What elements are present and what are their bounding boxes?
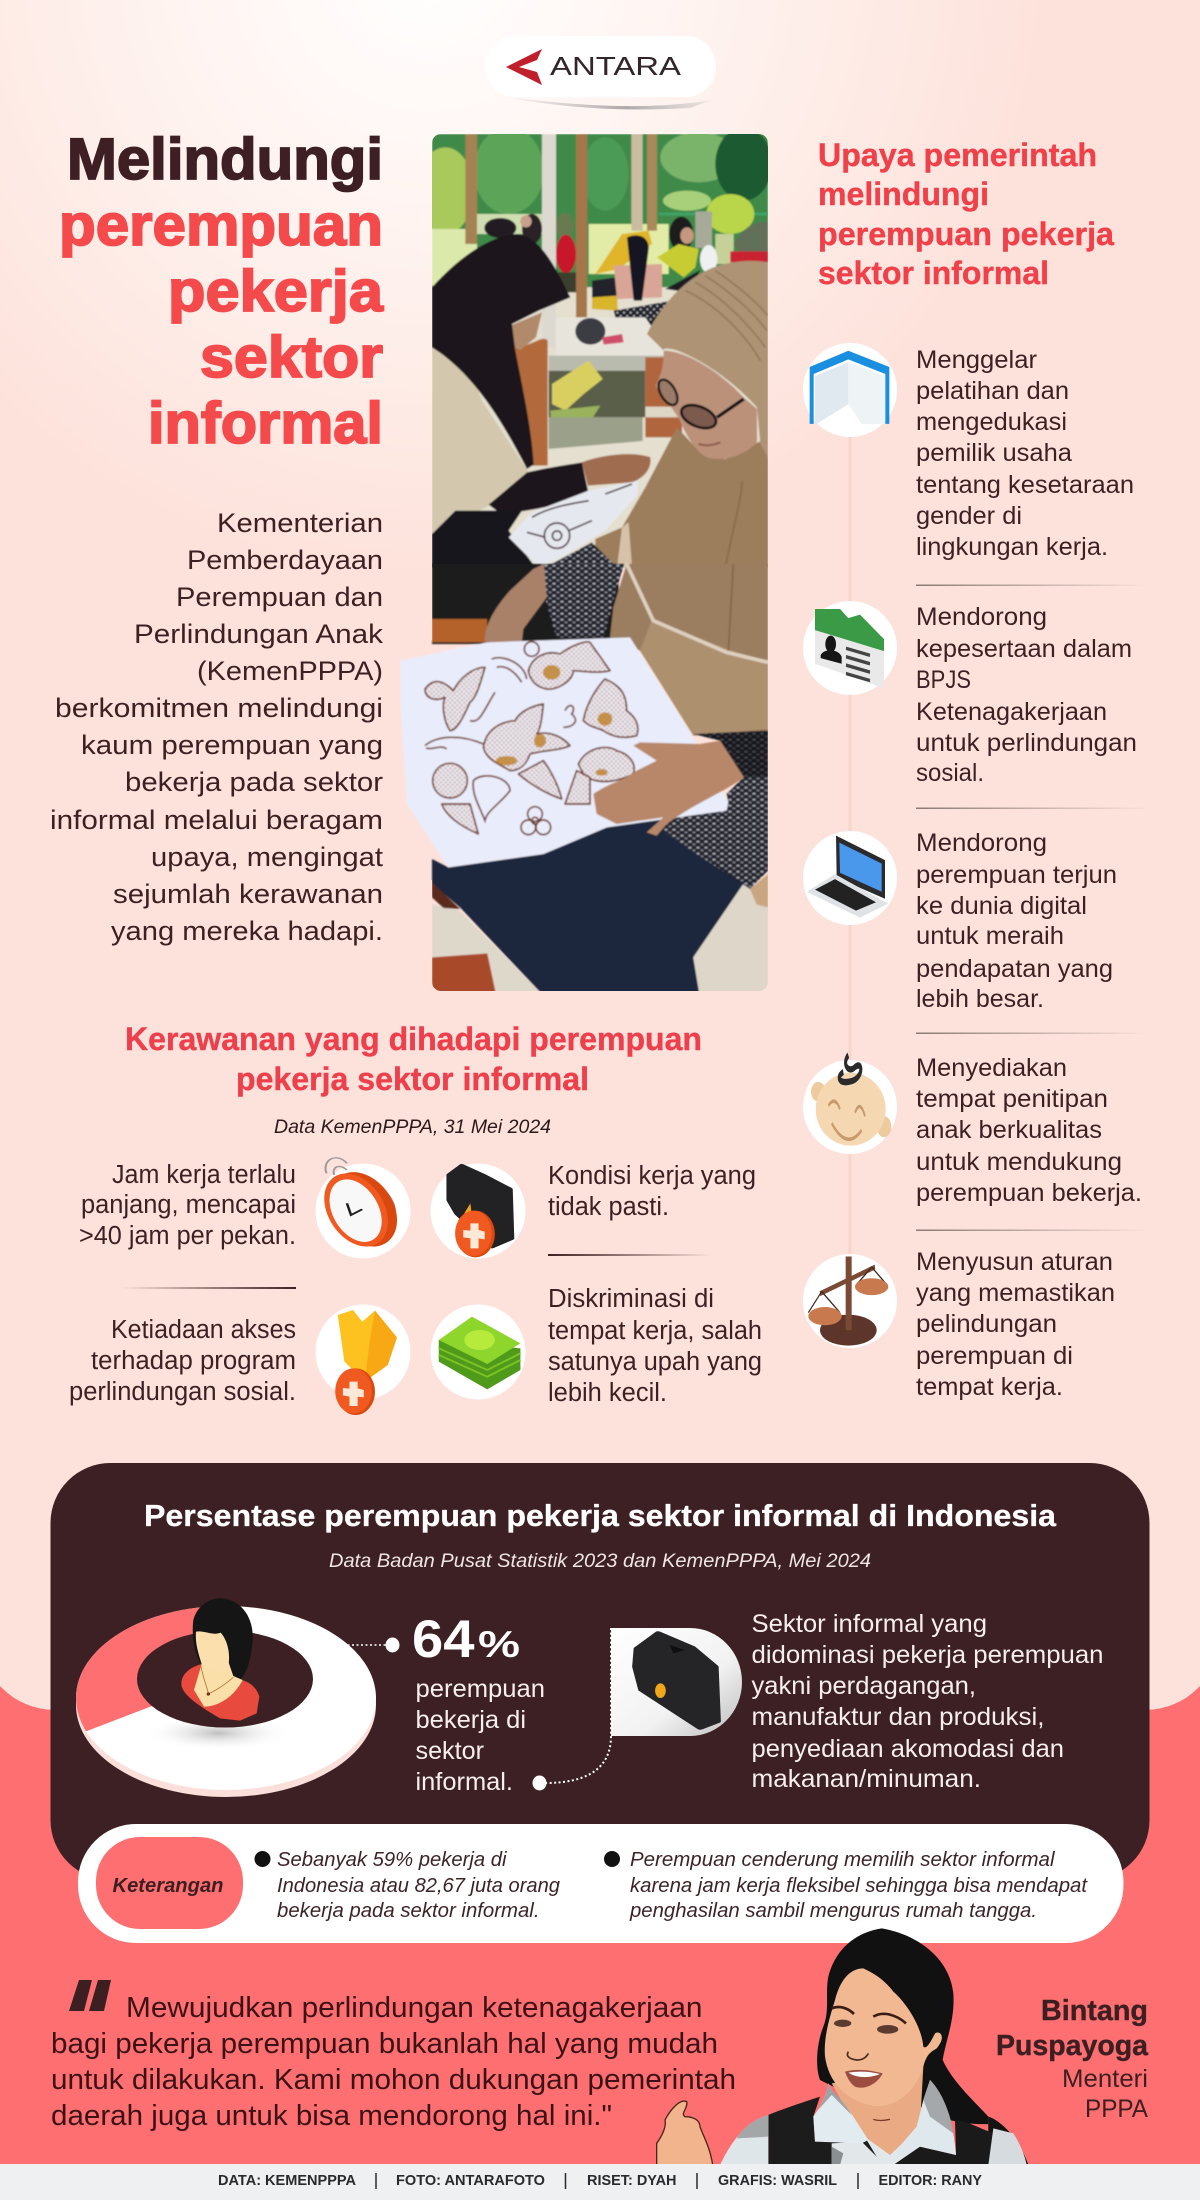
vulnerability: discrimination: Diskriminasi di xyxy=(548,1285,714,1313)
stat caption: bekerja di xyxy=(416,1706,526,1734)
text: digital xyxy=(916,829,1117,1013)
title xyxy=(59,127,384,456)
vulnerability: uncertain conditions: Kondisi kerja yang xyxy=(548,1162,756,1190)
text: dominant sectors: penyediaan akomodasi dan xyxy=(752,1735,1064,1763)
text: BPJS: Mendorong xyxy=(916,603,1047,631)
text: digital: perempuan terjun xyxy=(916,861,1117,889)
intro paragraph: (KemenPPPA) xyxy=(197,656,383,686)
heading: vulnerabilities xyxy=(125,1021,702,1097)
text: childcare: Menyediakan xyxy=(916,1054,1067,1082)
note 1: Sebanyak 59% pekerja di xyxy=(277,1849,507,1871)
vulnerability: discrimination xyxy=(548,1285,762,1407)
timeline line xyxy=(848,400,852,1300)
item 2: BPJS xyxy=(803,601,1137,787)
intro paragraph: Perempuan dan xyxy=(176,582,383,612)
woman figure xyxy=(181,1598,259,1721)
title: sektor xyxy=(200,325,383,390)
footer credits: GRAFIS: WASRIL xyxy=(718,2172,837,2189)
text: digital: untuk meraih xyxy=(916,922,1064,950)
text: regulation: Menyusun aturan xyxy=(916,1248,1113,1276)
footer credits: FOTO: ANTARAFOTO xyxy=(396,2172,545,2189)
icon: alarm clock xyxy=(314,1158,410,1258)
text: digital: pendapatan yang xyxy=(916,955,1113,983)
title: pekerja xyxy=(168,259,384,324)
logo: ANTARA: ANTARA xyxy=(550,51,682,81)
heading: government efforts: sektor informal xyxy=(818,255,1049,291)
text: childcare: perempuan bekerja. xyxy=(916,1179,1142,1207)
item 5: regulation xyxy=(803,1248,1115,1401)
panel heading: Persentase perempuan pekerja sektor informal di Indonesia xyxy=(144,1498,1057,1533)
footer credits xyxy=(0,2164,1200,2200)
icon: laptop xyxy=(803,831,897,925)
source: KemenPPPA: Data KemenPPPA, 31 Mei 2024 xyxy=(274,1117,551,1138)
logo: ANTARA xyxy=(485,36,716,110)
vulnerability: long hours xyxy=(79,1161,296,1250)
stat caption: informal. xyxy=(416,1768,513,1796)
text: digital: ke dunia digital xyxy=(916,892,1087,920)
intro paragraph: berkomitmen melindungi xyxy=(55,693,383,723)
text: training: gender di xyxy=(916,502,1022,530)
icon: shield with cross xyxy=(316,1304,410,1415)
light upper background xyxy=(0,0,1200,1710)
name: Bintang Puspayoga: Bintang xyxy=(1041,1995,1148,2027)
intro paragraph: Perlindungan Anak xyxy=(134,619,384,649)
text: training xyxy=(916,346,1134,561)
text: childcare xyxy=(916,1054,1142,1207)
vulnerability: no protection access: perlindungan sosial. xyxy=(69,1378,296,1406)
icon: money stack xyxy=(430,1304,526,1400)
icon: baby xyxy=(803,1055,897,1154)
text: digital: Mendorong xyxy=(916,829,1047,857)
coral lower background xyxy=(0,1600,1200,2200)
vulnerability: no protection access xyxy=(69,1316,296,1406)
photo: women making batik xyxy=(400,127,772,997)
text: regulation xyxy=(916,1248,1115,1401)
text: dominant sectors: Sektor informal yang xyxy=(752,1610,987,1638)
vulnerability: no protection access: terhadap program xyxy=(91,1347,296,1375)
heading: government efforts xyxy=(818,137,1114,291)
panel source: Data Badan Pusat Statistik 2023 dan KemenPPPA, Mei 2024 xyxy=(329,1551,871,1572)
vulnerability: uncertain conditions: tidak pasti. xyxy=(548,1193,669,1221)
text: childcare: untuk mendukung xyxy=(916,1148,1122,1176)
heading: vulnerabilities: Kerawanan yang dihadapi perempuan xyxy=(125,1021,702,1057)
text: childcare: tempat penitipan xyxy=(916,1085,1108,1113)
heading: vulnerabilities: pekerja sektor informal xyxy=(236,1061,589,1097)
text: dominant sectors xyxy=(752,1610,1104,1793)
text: regulation: pelindungan xyxy=(916,1310,1057,1338)
title: perempuan xyxy=(59,193,383,258)
text: dominant sectors: didominasi pekerja perempuan xyxy=(752,1641,1104,1669)
note 1 xyxy=(254,1849,560,1922)
title: Melindungi xyxy=(67,127,383,192)
vulnerability: discrimination: tempat kerja, salah xyxy=(548,1317,762,1345)
leader: dots to 64 xyxy=(325,1638,400,1652)
text: regulation: tempat kerja. xyxy=(916,1373,1063,1401)
intro paragraph: bekerja pada sektor xyxy=(125,767,383,797)
note 2: Perempuan cenderung memilih sektor informal xyxy=(630,1849,1055,1871)
text: training: mengedukasi xyxy=(916,408,1067,436)
quote text: Mewujudkan perlindungan ketenagakerjaan xyxy=(126,1992,703,2024)
icon: book xyxy=(803,343,897,437)
text: regulation: perempuan di xyxy=(916,1342,1073,1370)
stat caption: perempuan xyxy=(416,1675,545,1703)
text: BPJS: BPJS xyxy=(916,666,971,694)
quote xyxy=(51,1980,736,2132)
quote text: bagi pekerja perempuan bukanlah hal yang mudah xyxy=(51,2028,718,2060)
text: training: pelatihan dan xyxy=(916,377,1069,405)
vulnerability: discrimination: satunya upah yang xyxy=(548,1348,762,1376)
note 1: Indonesia atau 82,67 juta orang xyxy=(277,1875,560,1897)
name: Bintang Puspayoga: Menteri xyxy=(1062,2065,1148,2093)
text: dominant sectors: makanan/minuman. xyxy=(752,1765,981,1793)
text: dominant sectors: manufaktur dan produksi, xyxy=(752,1703,1044,1731)
stat: 64 percent: 64 xyxy=(412,1610,475,1669)
vulnerability: uncertain conditions xyxy=(548,1162,756,1221)
intro paragraph: Kementerian xyxy=(217,508,383,538)
vulnerability: discrimination: lebih kecil. xyxy=(548,1379,667,1407)
footer credits: EDITOR: RANY xyxy=(878,2172,982,2189)
intro paragraph: informal melalui beragam xyxy=(50,805,383,835)
title: informal xyxy=(148,391,383,456)
intro paragraph: upaya, mengingat xyxy=(151,842,384,872)
text: BPJS xyxy=(916,603,1137,787)
quote text: daerah juga untuk bisa mendorong hal ini." xyxy=(51,2100,612,2132)
text: training: lingkungan kerja. xyxy=(916,533,1108,561)
item 4: childcare xyxy=(803,1054,1142,1207)
footer credits: RISET: DYAH xyxy=(587,2172,676,2189)
icon: card xyxy=(803,601,897,695)
donut chart: 64 percent xyxy=(76,1598,376,1797)
note 1: bekerja pada sektor informal. xyxy=(277,1900,540,1922)
text: regulation: yang memastikan xyxy=(916,1279,1115,1307)
stat caption: sektor xyxy=(416,1737,484,1765)
quote text: untuk dilakukan. Kami mohon dukungan pemerintah xyxy=(51,2064,736,2096)
text: BPJS: untuk perlindungan xyxy=(916,729,1137,757)
leader: dots to sectors xyxy=(532,1628,611,1790)
intro paragraph: yang mereka hadapi. xyxy=(111,916,383,946)
stat caption xyxy=(416,1675,545,1796)
stat: 64 percent xyxy=(412,1610,520,1669)
text: dominant sectors: yakni perdagangan, xyxy=(752,1672,976,1700)
icon: quote mark xyxy=(69,1980,111,2011)
vulnerability: no protection access: Ketiadaan akses xyxy=(111,1316,296,1344)
name: Bintang Puspayoga: PPPA xyxy=(1085,2095,1148,2123)
text: childcare: anak berkualitas xyxy=(916,1116,1102,1144)
text: BPJS: sosial. xyxy=(916,759,984,787)
notes label xyxy=(96,1837,243,1929)
name: Bintang Puspayoga: Puspayoga xyxy=(996,2030,1149,2062)
text: training: tentang kesetaraan xyxy=(916,471,1134,499)
heading: government efforts: melindungi xyxy=(818,176,989,212)
portrait: Bintang Puspayoga xyxy=(657,1928,1028,2165)
stat: 64 percent: % xyxy=(478,1624,520,1665)
intro paragraph: kaum perempuan yang xyxy=(81,730,383,760)
vulnerability: long hours: panjang, mencapai xyxy=(81,1191,296,1219)
text: BPJS: kepesertaan dalam xyxy=(916,635,1132,663)
notes label: Keterangan xyxy=(112,1875,224,1897)
notes panel xyxy=(78,1824,1124,1943)
vulnerability: long hours: >40 jam per pekan. xyxy=(79,1222,296,1250)
footer credits: DATA: KEMENPPPA xyxy=(218,2172,356,2189)
icon: scales xyxy=(803,1254,897,1348)
note 2 xyxy=(604,1849,1088,1922)
text: training: Menggelar xyxy=(916,346,1037,374)
icon: briefcase on white tab xyxy=(611,1628,742,1736)
heading: government efforts: perempuan pekerja xyxy=(818,216,1114,252)
item 3: digital xyxy=(803,829,1117,1013)
intro paragraph xyxy=(50,508,384,946)
quote text xyxy=(51,1992,736,2132)
text: training: pemilik usaha xyxy=(916,439,1072,467)
heading: government efforts: Upaya pemerintah xyxy=(818,137,1097,173)
icon: briefcase with cross xyxy=(430,1164,526,1258)
name: Bintang Puspayoga xyxy=(996,1995,1149,2123)
text: BPJS: Ketenagakerjaan xyxy=(916,698,1107,726)
intro paragraph: sejumlah kerawanan xyxy=(113,879,383,909)
vulnerability: long hours: Jam kerja terlalu xyxy=(112,1161,296,1189)
note 2: karena jam kerja fleksibel sehingga bisa mendapat xyxy=(630,1875,1088,1897)
note 2: penghasilan sambil mengurus rumah tangga. xyxy=(629,1900,1037,1922)
intro paragraph: Pemberdayaan xyxy=(187,545,383,575)
panel: percentage of women informal workers xyxy=(40,1463,1150,1880)
item 1: training xyxy=(803,343,1134,561)
text: digital: lebih besar. xyxy=(916,985,1044,1013)
